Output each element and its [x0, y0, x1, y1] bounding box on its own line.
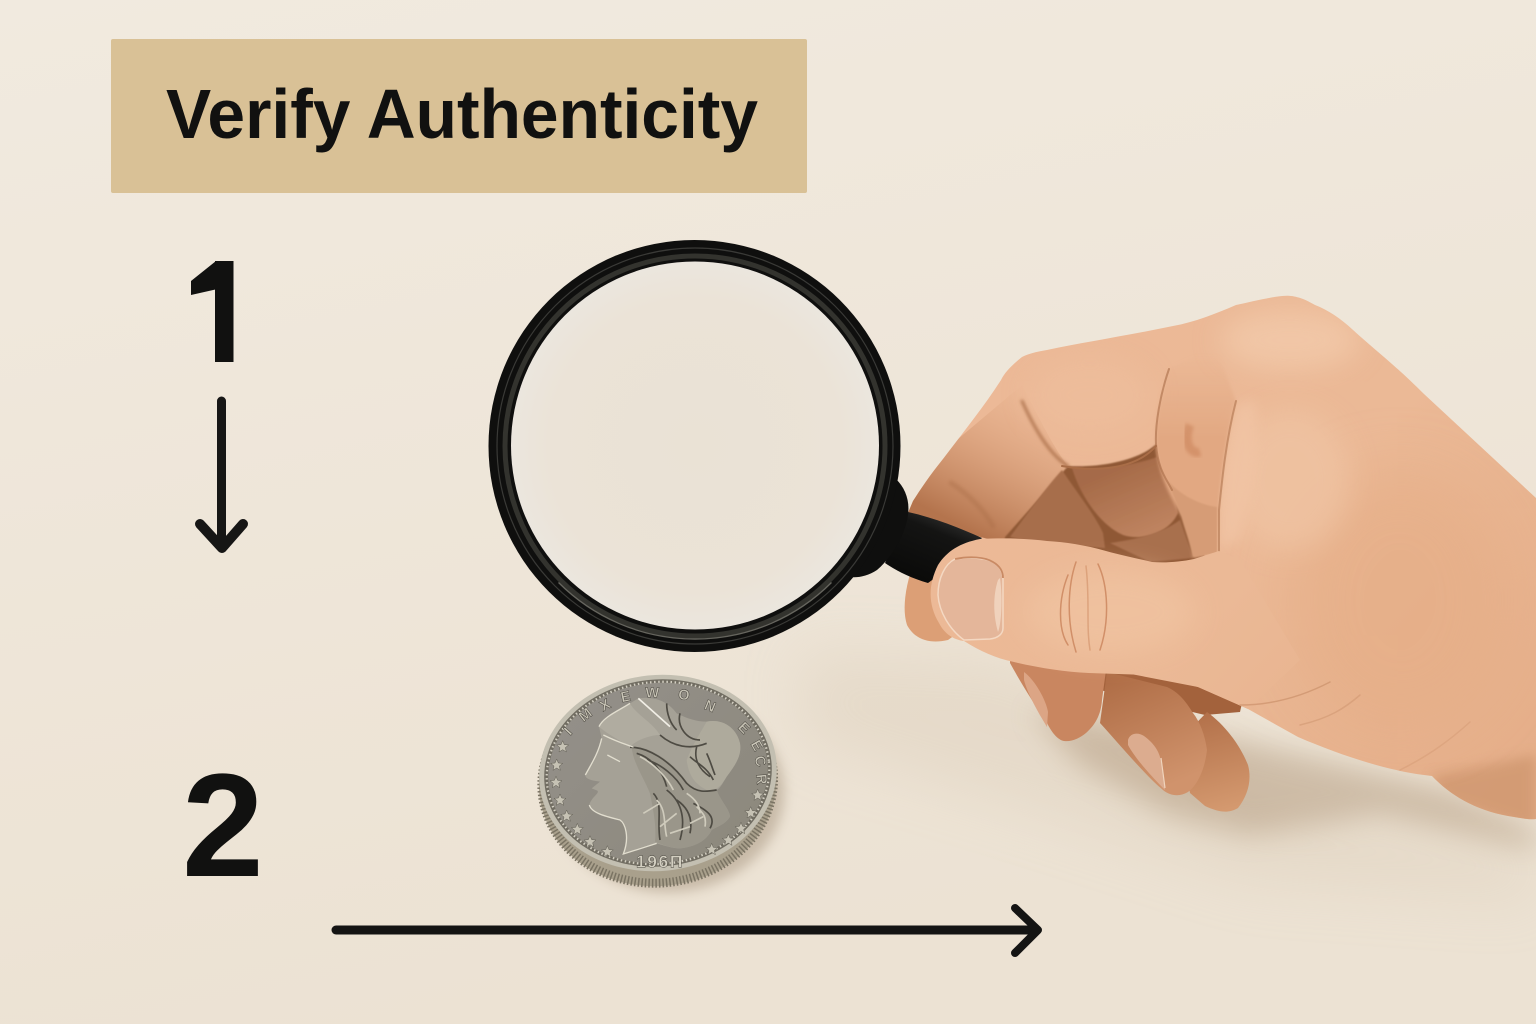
coin face	[529, 663, 787, 883]
coin legend lettering: N	[702, 698, 718, 716]
middle finger nail	[1128, 734, 1165, 790]
palm creases	[1240, 682, 1470, 770]
step number 1: 1	[183, 234, 261, 392]
collar	[850, 479, 908, 577]
coin scratch	[638, 698, 670, 727]
main hand shape	[905, 296, 1536, 819]
second curled finger	[1072, 457, 1178, 537]
coin reeded edge	[528, 666, 787, 898]
thumb shape	[931, 538, 1300, 709]
coin stars	[550, 741, 764, 857]
finger base under thumb	[1090, 660, 1245, 715]
arrow: right from step 2	[336, 908, 1038, 953]
pinky finger	[1180, 712, 1250, 812]
palm sliver	[1110, 520, 1193, 562]
handle	[885, 512, 982, 583]
step number 1	[191, 261, 234, 362]
curled finger interior	[1002, 444, 1205, 564]
fingertip behind the handle	[905, 560, 990, 641]
arrow: down from step 1	[200, 401, 243, 548]
coin	[528, 663, 787, 898]
cast shadows on the paper	[552, 650, 1536, 900]
hand: palm and fingers	[900, 296, 1536, 830]
ring finger	[1010, 655, 1106, 741]
coin legend lettering: E	[747, 738, 766, 754]
thumb nail	[938, 558, 1003, 640]
hand shading	[900, 310, 1536, 830]
coin legend lettering: C	[750, 754, 769, 769]
coin legend lettering: R	[752, 773, 769, 786]
magnifying glass	[488, 240, 982, 652]
coin legend lettering: E	[734, 719, 753, 738]
finger crease lines	[951, 369, 1236, 551]
thumb knuckle wrinkles	[1060, 562, 1107, 652]
coin legend lettering: X	[597, 696, 614, 715]
coin legend lettering: O	[677, 687, 691, 704]
coin legend lettering: E	[619, 689, 632, 706]
index knuckle segment	[1156, 345, 1236, 558]
coin legend lettering: W	[645, 685, 659, 701]
rim	[488, 240, 900, 652]
step number 2: 2	[182, 744, 264, 908]
hand: thumb	[931, 538, 1470, 770]
ring finger nail	[1024, 672, 1048, 727]
coin legend lettering: M	[576, 705, 596, 726]
coin legend lettering: I	[561, 725, 576, 739]
coin portrait	[585, 698, 740, 854]
third curled finger	[1010, 470, 1105, 548]
middle finger	[1100, 672, 1207, 795]
thumb highlight	[1025, 570, 1195, 654]
title banner: Verify Authenticity	[166, 75, 758, 153]
coin legend lettering	[561, 685, 769, 786]
coin date: 196Π	[636, 851, 684, 871]
lens	[511, 262, 879, 630]
title banner	[111, 39, 807, 193]
